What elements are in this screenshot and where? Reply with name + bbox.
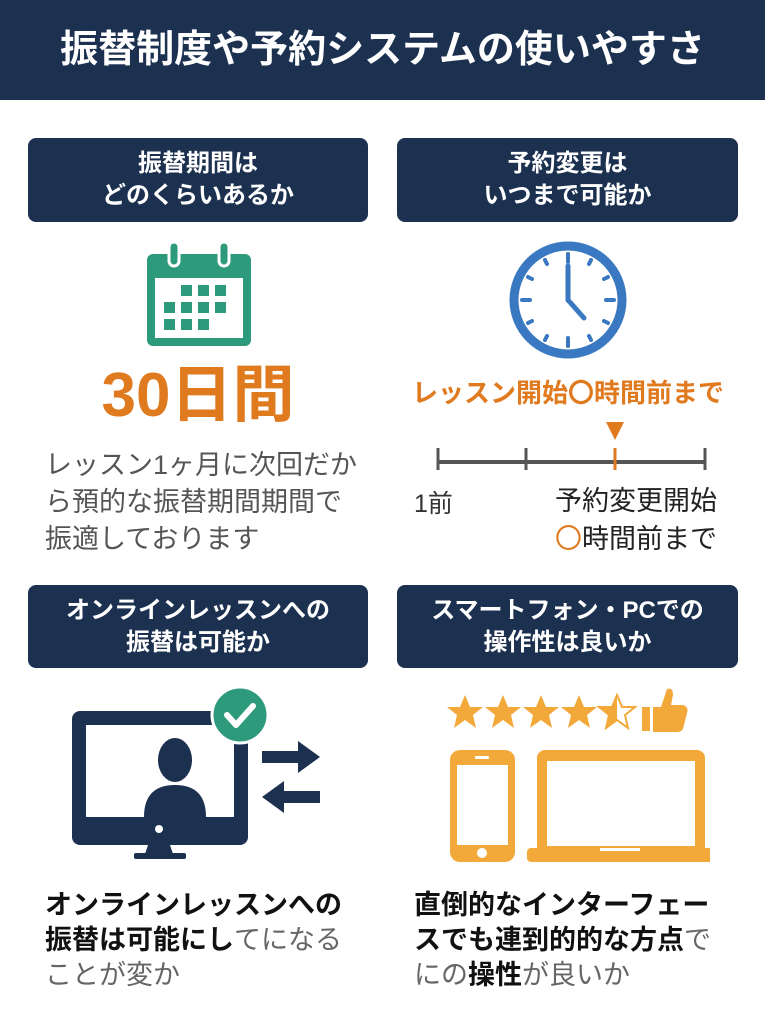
body text left: レッスン1ヶ月に次回だか xyxy=(45,450,357,480)
heading: transfer period: 振替期間は xyxy=(138,150,258,177)
timeline label: change start xyxy=(555,486,717,554)
title bar xyxy=(0,0,765,100)
timeline label: change start: 〇時間前まで xyxy=(555,524,717,554)
timeline label: change start: 予約変更開始 xyxy=(555,486,717,516)
heading: reservation change: 予約変更は xyxy=(508,150,628,177)
body text: interface xyxy=(414,890,711,990)
icon: calendar xyxy=(147,244,251,346)
big number: 30 days: 30日間 xyxy=(102,361,294,430)
icon: rating stars and devices xyxy=(447,688,710,862)
body text: online transfer: オンラインレッスンへの xyxy=(45,890,342,920)
body text: online transfer: ことが変か xyxy=(45,960,180,990)
heading: transfer period: どのくらいあるか xyxy=(102,182,294,209)
heading: transfer period xyxy=(28,138,368,222)
heading: online transfer: オンラインレッスンへの xyxy=(66,596,330,624)
body text: interface: にの操性が良いか xyxy=(414,960,630,990)
timeline chart xyxy=(436,422,706,470)
body text: interface: スでも連到的的な方点で xyxy=(414,925,711,955)
heading: smartphone PC: 操作性は良いか xyxy=(484,628,652,656)
callout: lesson start hours before: レッスン開始〇時間前まで xyxy=(412,378,724,408)
icon: monitor with person and arrows xyxy=(72,688,320,859)
icon: clock xyxy=(510,242,626,358)
heading: reservation change xyxy=(397,138,738,222)
body text: online transfer xyxy=(45,890,342,990)
heading: online transfer: 振替は可能か xyxy=(126,628,270,656)
body text left xyxy=(45,450,357,554)
heading: smartphone PC xyxy=(397,585,738,668)
title bar: 振替制度や予約システムの使いやすさ xyxy=(60,29,705,71)
heading: reservation change: いつまで可能か xyxy=(484,182,652,209)
body text: interface: 直倒的なインターフェー xyxy=(414,890,709,920)
heading: smartphone PC: スマートフォン・PCでの xyxy=(431,596,704,624)
body text: online transfer: 振替は可能にしてになる xyxy=(45,925,342,955)
body text left: ら預的な振替期間期間で xyxy=(45,487,342,517)
timeline label: 1 before: 1前 xyxy=(414,490,453,518)
body text left: 振適しております xyxy=(45,524,259,554)
heading: online transfer xyxy=(28,585,368,668)
